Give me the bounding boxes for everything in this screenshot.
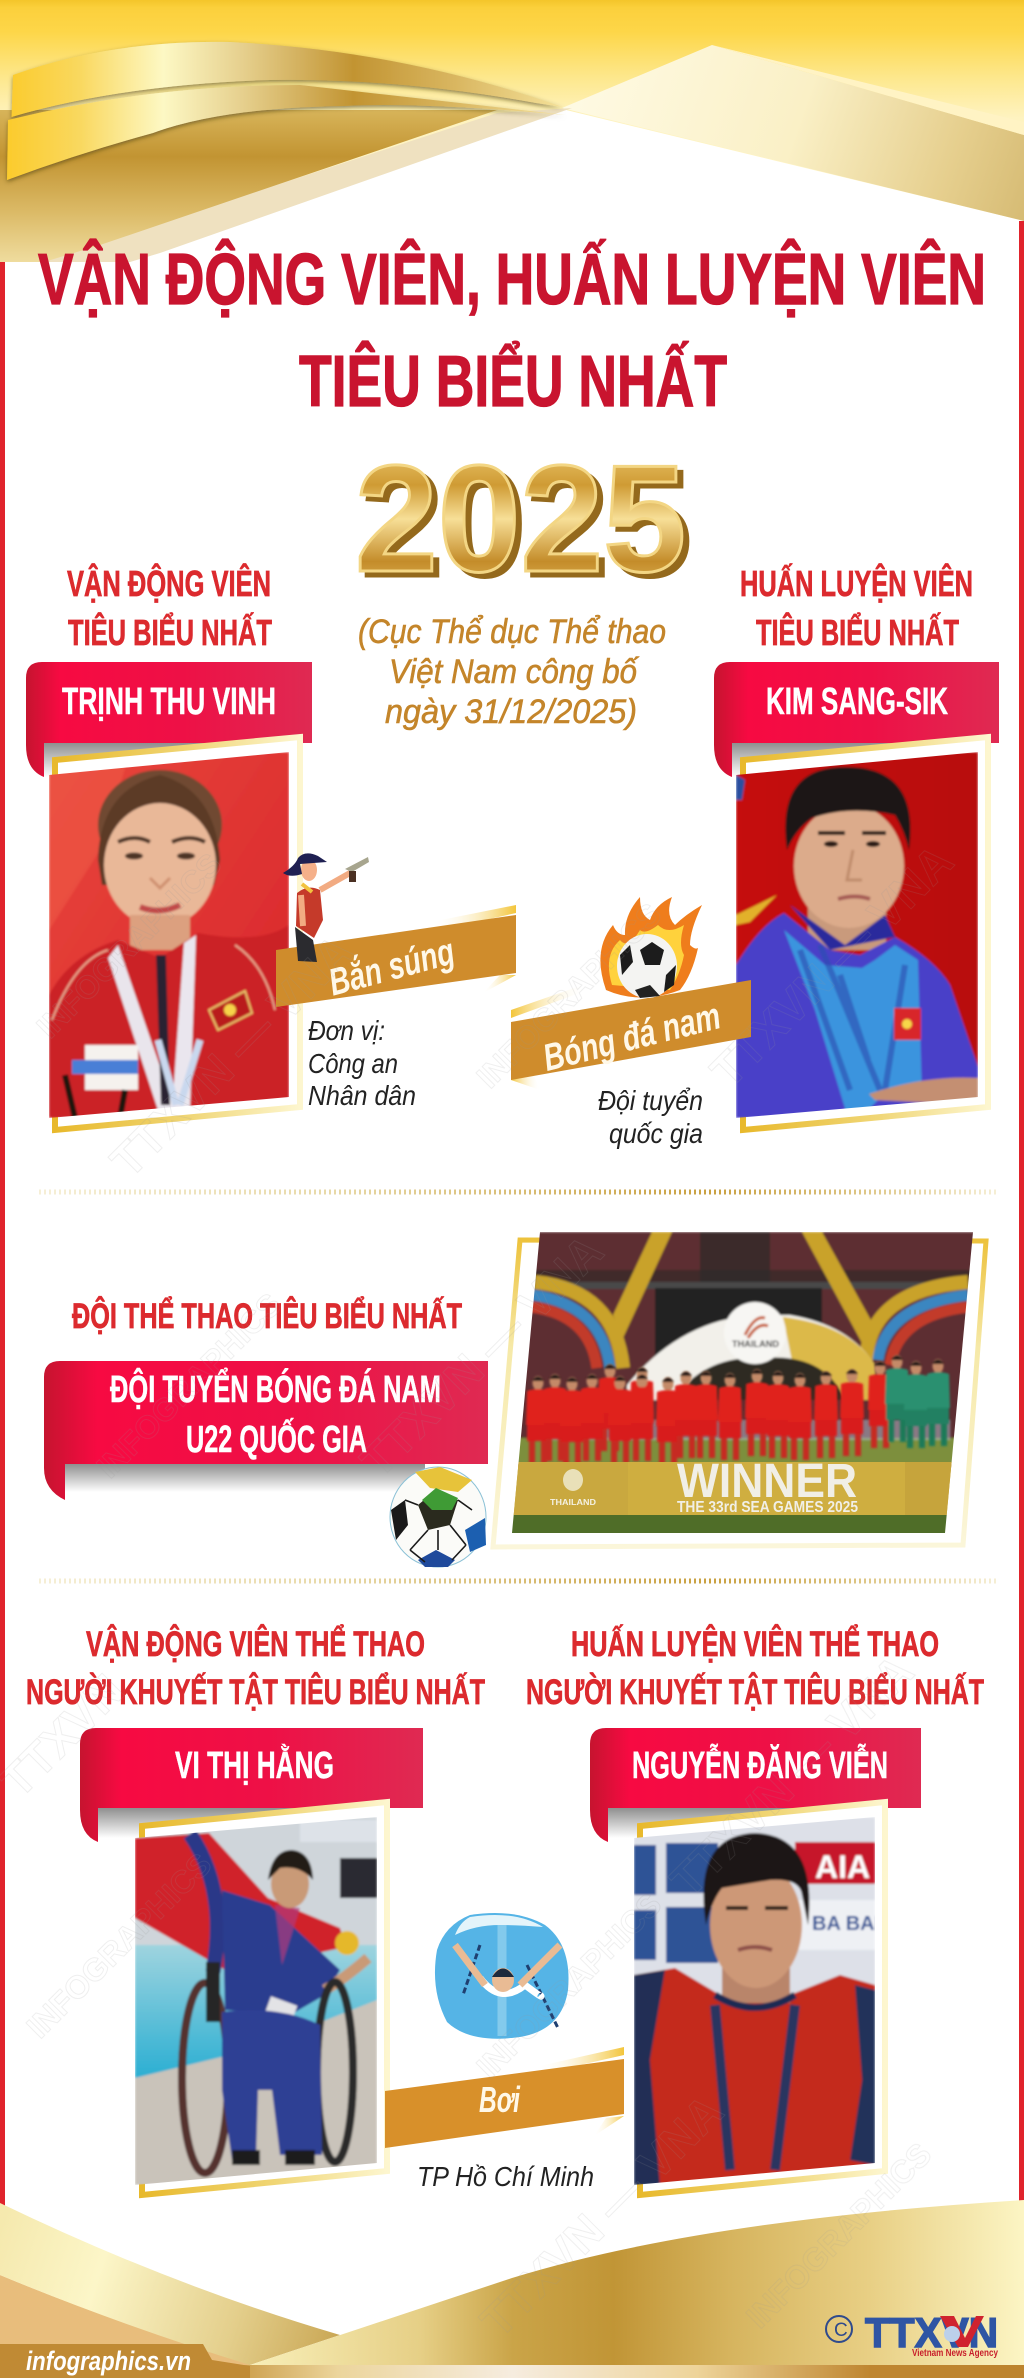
unit text: Nhân dân (308, 1080, 416, 1111)
watermark: INFOGRAPHICS (739, 2136, 938, 2335)
sport ribbon: shooting (276, 905, 516, 1007)
panel: best athlete (26, 562, 516, 1130)
team text (598, 1085, 703, 1149)
unit text: Đơn vị: (308, 1015, 385, 1046)
photo: Nguyễn Đăng Viễn (634, 1817, 889, 2185)
watermark: TTXVN — VNA (350, 1224, 613, 1487)
heading: best athlete: VẬN ĐỘNG VIÊN (67, 562, 271, 604)
photo frame (142, 1802, 387, 2195)
icon: swimmer (435, 1913, 569, 2039)
icon: sport shooter (283, 853, 369, 962)
name ribbon: Kim Sang-sik (714, 662, 999, 777)
logo: TTXVN: C (834, 2320, 848, 2341)
name ribbon: U22 team: ĐỘI TUYỂN BÓNG ĐÁ NAM (110, 1366, 441, 1411)
winner banner: THAILAND (550, 1498, 596, 1507)
team text: quốc gia (609, 1118, 703, 1149)
team players (526, 1355, 950, 1464)
divider 1 (39, 1190, 999, 1194)
watermark: TTXVN — VNA (100, 924, 363, 1187)
name ribbon: Nguyễn Đăng Viễn (590, 1728, 921, 1842)
source note: ngày 31/12/2025) (385, 693, 637, 731)
watermark (0, 834, 963, 2347)
heading: para athlete: NGƯỜI KHUYẾT TẬT TIÊU BIỂU NHẤT (26, 1672, 485, 1712)
sport ribbon: men's football: Bóng đá nam (539, 995, 725, 1080)
photo: Nguyễn Đăng Viễn: AIA (815, 1849, 870, 1885)
photo: Vi Thị Hằng (135, 1817, 377, 2185)
photo: Nguyễn Đăng Viễn: BA BAN (812, 1913, 889, 1935)
panel: best coach (511, 562, 999, 1149)
name ribbon: Nguyễn Đăng Viễn: NGUYỄN ĐĂNG VIỄN (632, 1743, 888, 1787)
main title: TIÊU BIỂU NHẤT (299, 341, 727, 422)
heading: para coach (526, 1624, 984, 1712)
panel: best para coach (526, 1624, 984, 2195)
photo: Trịnh Thu Vinh (49, 752, 289, 1118)
name ribbon: Vi Thị Hằng (80, 1728, 423, 1842)
heading: best coach (740, 562, 973, 653)
year 2025 gold numerals: 2025 (355, 434, 686, 604)
photo frame (493, 1240, 986, 1547)
name ribbon: U22 team: U22 QUỐC GIA (186, 1416, 367, 1461)
team text: Đội tuyển (598, 1085, 703, 1116)
site tab: infographics.vn (26, 2346, 191, 2376)
unit text: Công an (308, 1048, 398, 1079)
watermark: INFOGRAPHICS (89, 1286, 288, 1485)
photo: team celebration (505, 1232, 980, 1535)
heading: best team: ĐỘI THỂ THAO TIÊU BIỂU NHẤT (72, 1296, 462, 1336)
watermark: INFOGRAPHICS (19, 1846, 218, 2045)
panel: best team (44, 1232, 986, 1567)
photo: Kim Sang-sik (736, 752, 978, 1118)
name ribbon: Trịnh Thu Vinh (26, 662, 312, 777)
watermark: INFOGRAPHICS (469, 1886, 668, 2085)
sport ribbon: swimming: Bơi (479, 2079, 521, 2120)
source note: (Cục Thể dục Thể thao (358, 613, 666, 651)
winner banner: WINNER (677, 1455, 857, 1508)
logo: TTXVN: Vietnam News Agency (912, 2348, 998, 2359)
photo frame (640, 1802, 885, 2195)
name ribbon: Vi Thị Hằng: VI THỊ HẰNG (175, 1743, 334, 1787)
photo: team celebration: THAILAND (732, 1339, 780, 1349)
heading: para athlete (26, 1624, 485, 1712)
heading: best athlete: TIÊU BIỂU NHẤT (68, 611, 272, 653)
year 2025 gold numerals: 2025 (361, 439, 692, 609)
panel: best para athlete (26, 1624, 624, 2195)
heading: para athlete: VẬN ĐỘNG VIÊN THỂ THAO (86, 1624, 425, 1664)
unit text (308, 1015, 416, 1111)
footer gold band (0, 2200, 1024, 2378)
watermark: TTXVN — VNA (470, 2084, 733, 2347)
logo: TTXVN: TTXVN (865, 2309, 998, 2356)
photo frame (743, 737, 988, 1130)
watermark: TTXVN — VNA (700, 834, 963, 1097)
heading: best athlete (67, 562, 272, 653)
watermark: INFOGRAPHICS (469, 896, 668, 1095)
name ribbon: Trịnh Thu Vinh: TRỊNH THU VINH (62, 681, 276, 723)
main title (38, 239, 986, 422)
icon: colourful football (390, 1467, 486, 1567)
watermark: INFOGRAPHICS (29, 846, 228, 1045)
unit text: TP Hồ Chí Minh (417, 2161, 594, 2192)
source note (358, 613, 666, 731)
source note: Việt Nam công bố (389, 653, 640, 691)
header gold banner (0, 0, 1024, 262)
winner banner: THE 33rd SEA GAMES 2025 (677, 1499, 858, 1516)
winner banner (512, 1462, 952, 1533)
sport ribbon: shooting: Bắn súng (324, 929, 459, 1004)
photo frame (55, 737, 300, 1130)
watermark: TTXVN — VNA (660, 1644, 923, 1907)
gold ribbon swoosh (7, 42, 566, 180)
divider 2 (39, 1578, 999, 1584)
name ribbon: U22 team (44, 1361, 488, 1500)
icon: flaming football (600, 897, 702, 998)
sport ribbon: swimming (385, 2047, 624, 2148)
